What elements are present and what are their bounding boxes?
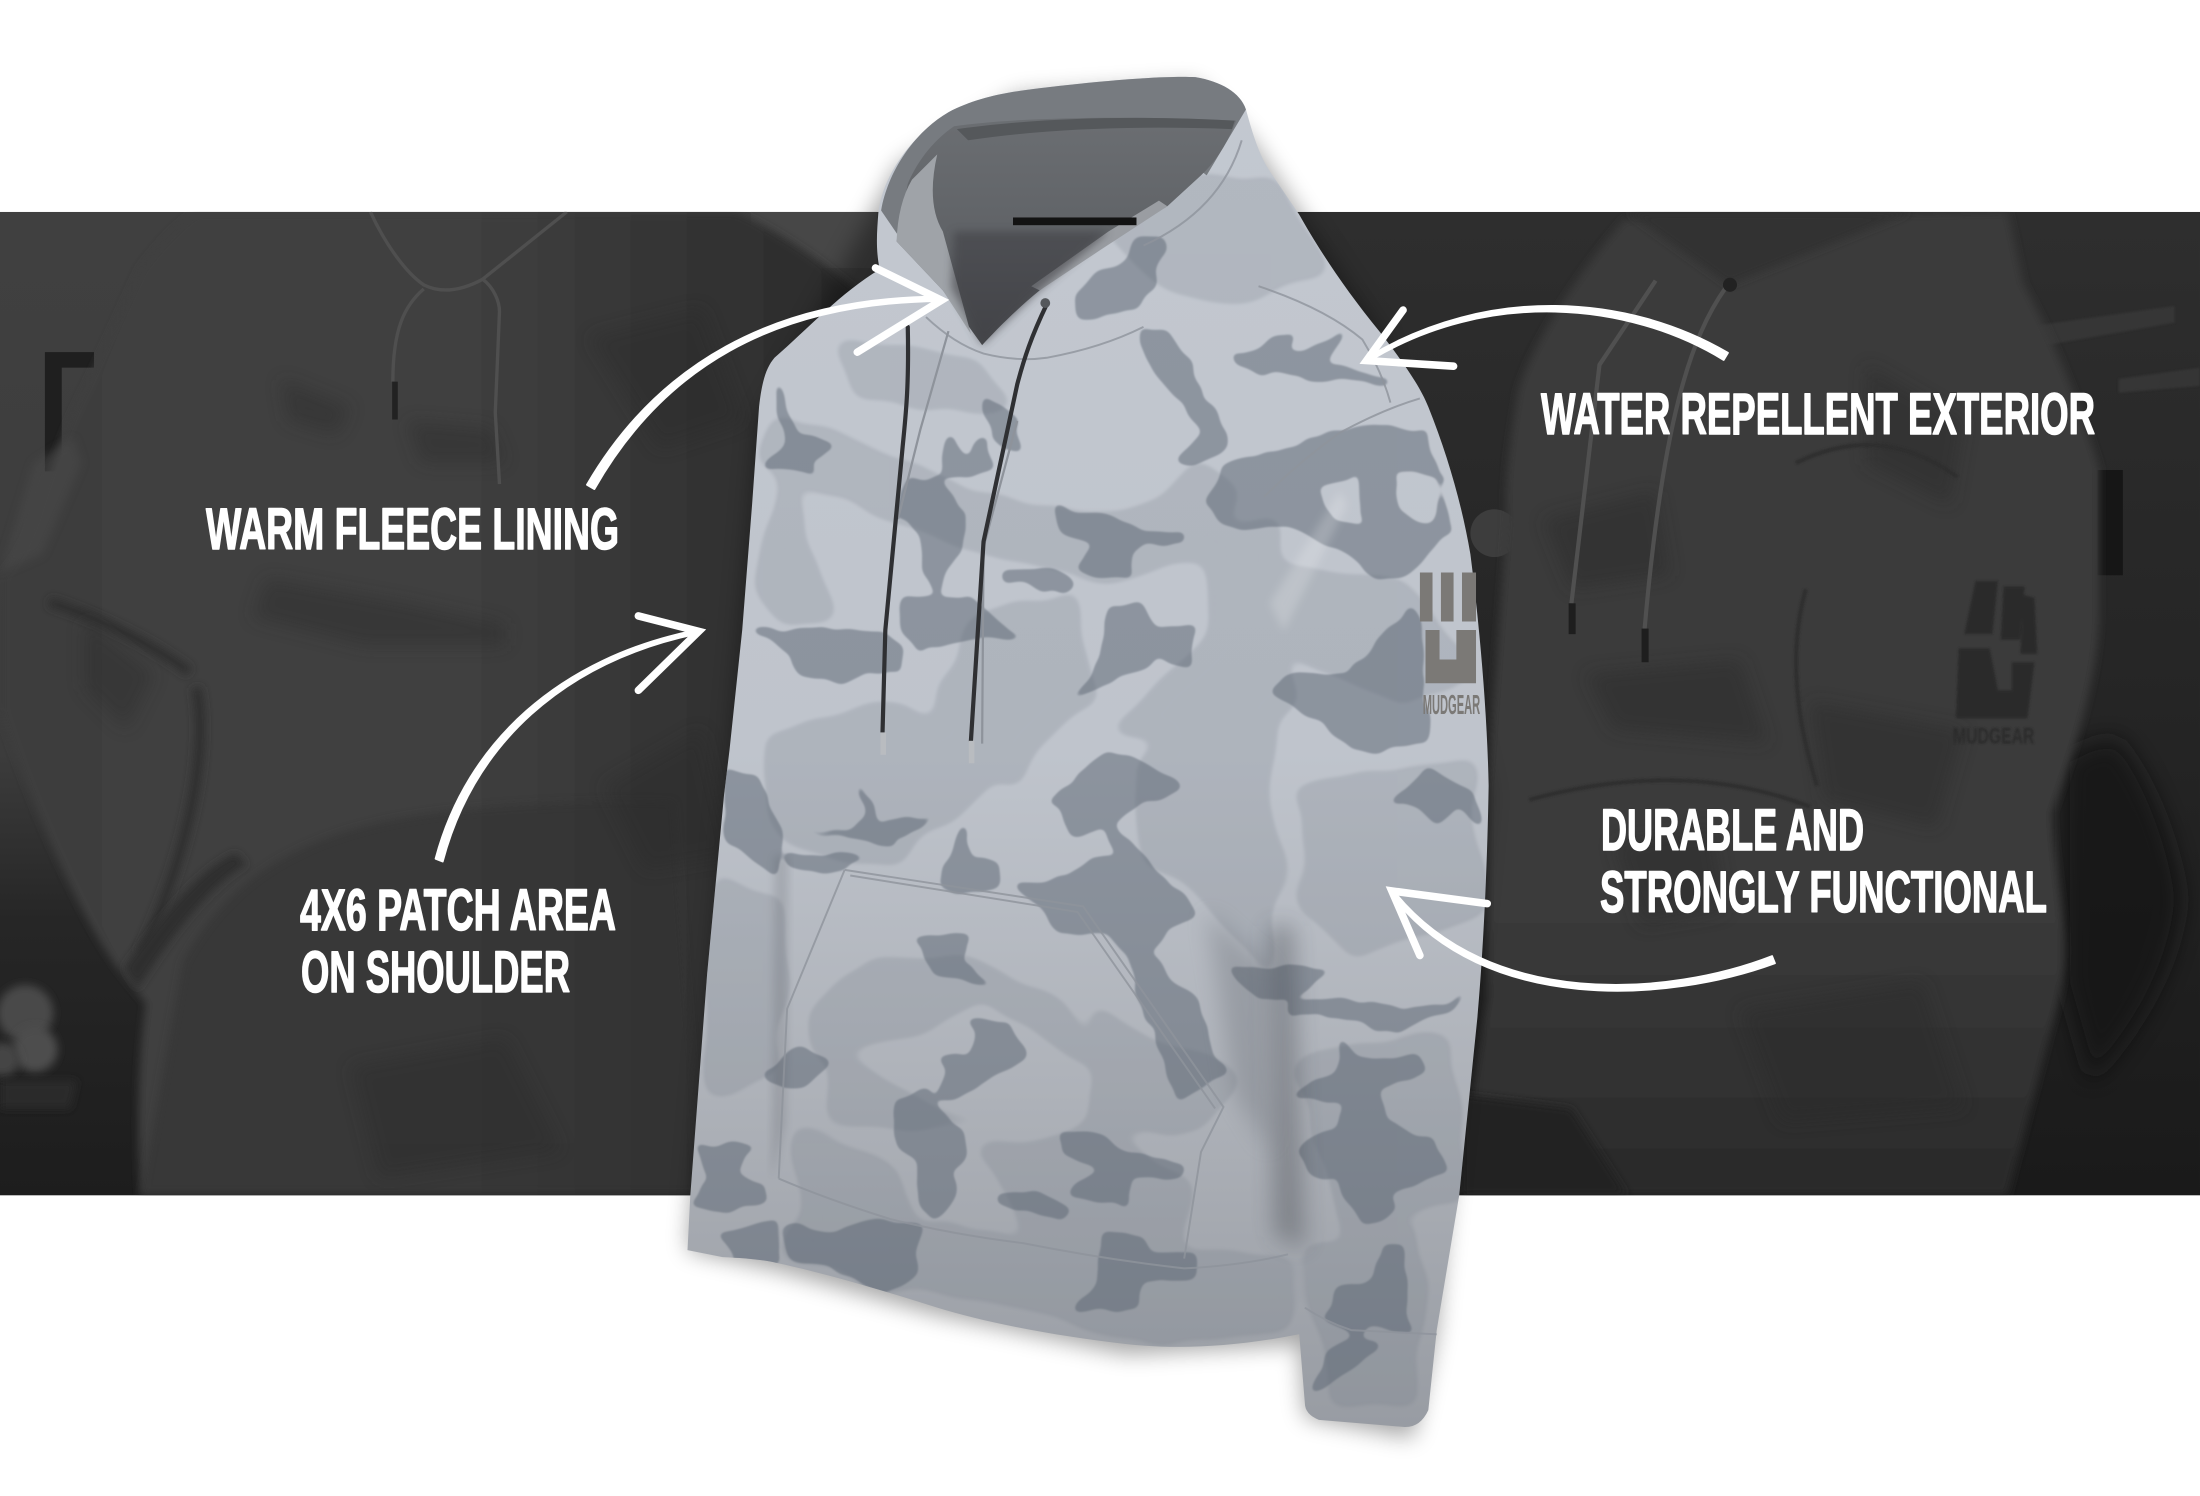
- hoodie drop shadow: [687, 84, 1487, 1438]
- label: 4x6 patch area on shoulder: 4X6 PATCH AREA: [300, 878, 616, 943]
- label: warm fleece lining: WARM FLEECE LINING: [206, 497, 619, 562]
- label: 4x6 patch area on shoulder: [300, 878, 616, 1005]
- fleece trim: [897, 154, 971, 334]
- eyelet: [1040, 298, 1050, 308]
- neck shadow: [951, 232, 1108, 345]
- hood rim: [881, 77, 1246, 246]
- product image: camo hoodie: [687, 77, 1489, 1438]
- infographic canvas: MUDGEAR: [1423, 689, 1480, 720]
- inner pale drawcord: [898, 331, 1017, 744]
- hoodie seams: [779, 140, 1437, 1334]
- camouflage pattern: [690, 182, 1483, 1403]
- icon: sleeve logo: [1420, 572, 1480, 720]
- neck label: [1013, 217, 1136, 225]
- arrow: durable and functional: [1392, 891, 1775, 991]
- left figure drawstrings: [370, 212, 567, 484]
- panel: right lifestyle photo: [1291, 212, 2200, 1195]
- icon: arm logo on photo: MUDGEAR: [1953, 724, 2034, 749]
- arrow: patch area: [436, 616, 699, 861]
- arrow: water repellent exterior: [1367, 306, 1728, 366]
- icon: arm logo on photo: [1953, 581, 2037, 749]
- drawstring aglets: [880, 732, 974, 763]
- hood fleece interior: [897, 118, 1236, 345]
- sleeve and fold shading: [772, 491, 1347, 1249]
- panel: left lifestyle photo: [0, 212, 898, 1195]
- label: durable and strongly functional: DURABLE AND: [1601, 798, 1864, 863]
- dark photo band: [0, 212, 2200, 1195]
- label: durable and strongly functional: [1600, 798, 2047, 925]
- hoodie body silhouette: [687, 77, 1489, 1427]
- arrow: warm fleece lining: [587, 268, 941, 489]
- drawstrings: [883, 304, 1047, 741]
- label: 4x6 patch area on shoulder: ON SHOULDER: [301, 940, 570, 1005]
